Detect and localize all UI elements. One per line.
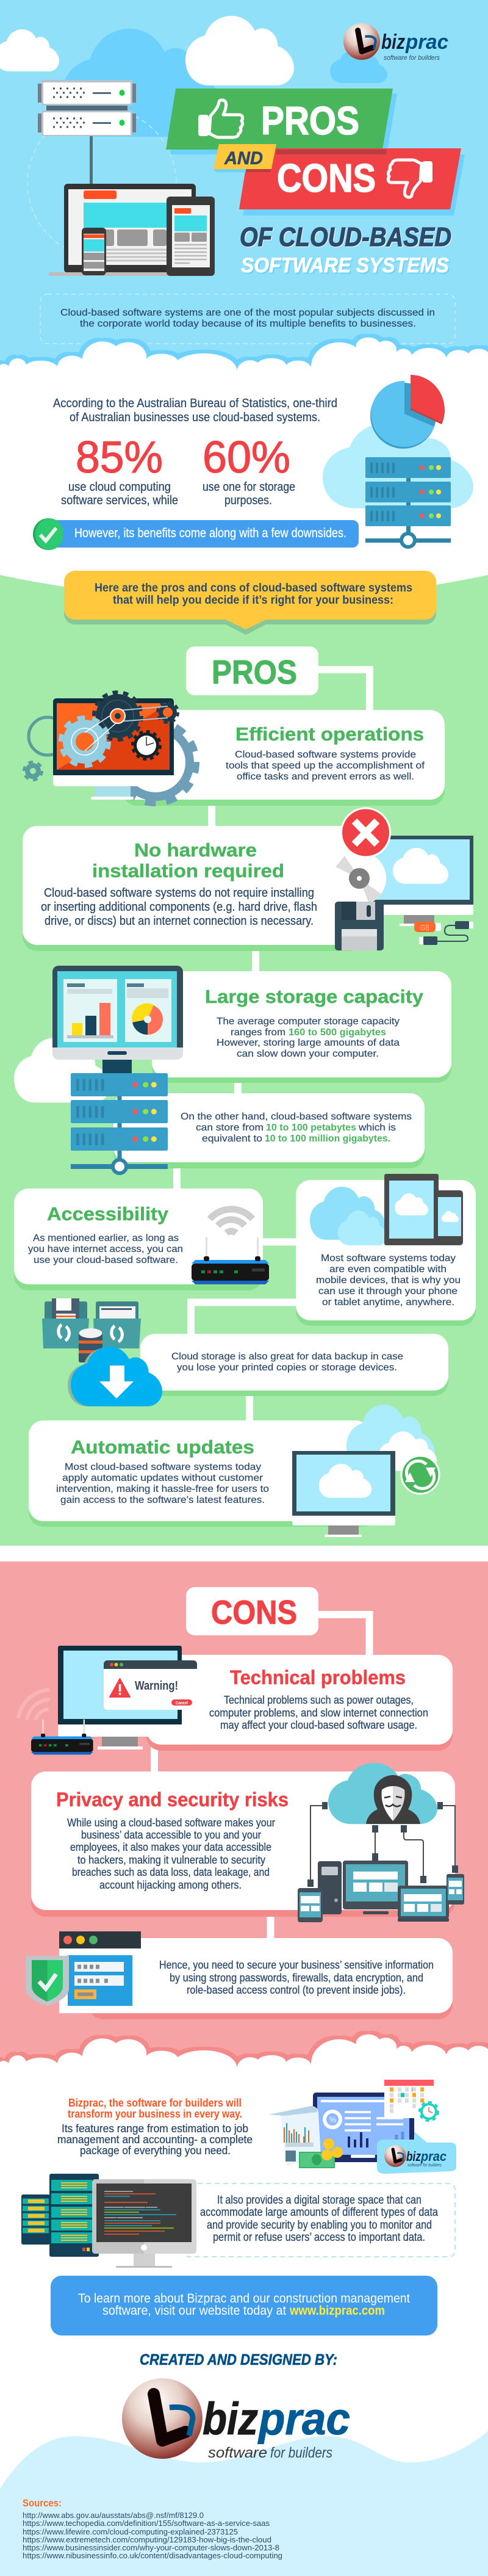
title banner: pros: PROS: [261, 98, 359, 143]
body text: to hackers, making it vulnerable to security: [77, 1854, 265, 1866]
body text: While using a cloud-based software makes your: [67, 1817, 275, 1829]
body text: breaches such as data loss, data leakage, and: [72, 1866, 270, 1878]
body text: apply automatic updates without customer: [62, 1473, 264, 1483]
callout: website blue box: To learn more about Bizprac and our construction management: [78, 2292, 410, 2306]
body text: intervention, making it hassle-free for users to: [56, 1484, 269, 1494]
icon: monitor with gears: [24, 692, 196, 803]
body text: or inserting additional components (e.g. hard drive, flash: [41, 900, 317, 914]
body text: permit or refuse users’ access to important data.: [213, 2231, 425, 2244]
cloud border between cons and bizprac: [0, 2031, 488, 2100]
laptop: [49, 184, 196, 276]
text: bizprac pitch: transform your business in every way.: [68, 2108, 242, 2120]
header sky panel: [0, 0, 488, 391]
icon: monitor, disc, floppy, usb: [332, 808, 473, 950]
logo: bizprac in bubble: [384, 2145, 447, 2168]
body text: business’ data accessible to you and your: [81, 1829, 261, 1841]
icon: cloud server with pie chart: [323, 375, 473, 547]
heading: cons: [186, 1587, 318, 1635]
logo: bizprac top: prac: [405, 31, 448, 54]
pink cons background: [0, 1561, 488, 2075]
panel: privacy and security risks: [31, 1763, 464, 1922]
heading: No hardware: [134, 839, 257, 861]
body text: 10 to 100 million gigabytes.: [265, 1134, 390, 1144]
icon: wifi router: [192, 1209, 269, 1284]
stats intro text: [53, 397, 337, 424]
heading: pros: PROS: [212, 653, 297, 691]
body text: can store from: [196, 1123, 264, 1133]
phone: [82, 228, 106, 275]
body text: [217, 1016, 400, 1059]
text: bizprac pitch: Its features range from estimation to job: [62, 2122, 248, 2135]
logo: bizprac large: software: [208, 2445, 267, 2461]
icon: folders, database and download cloud: [42, 1298, 162, 1406]
body text: office tasks and prevent errors as well.: [237, 772, 414, 782]
body text: Cloud-based software systems do not require installing: [44, 886, 314, 900]
body text: accommodate large amounts of different types of data: [200, 2206, 438, 2219]
body text: which is: [358, 1123, 396, 1133]
icon: monitor, disc, floppy, usb: GB: [420, 923, 429, 932]
logo: bizprac in bubble: prac: [420, 2149, 447, 2164]
body text: As mentioned earlier, as long as: [33, 1233, 179, 1243]
sources list: https://www.lifewire.com/cloud-computing-explained-2373125: [23, 2528, 238, 2536]
body text: Cloud-based software systems provide: [235, 750, 416, 760]
panel: accessibility: Accessibility: [47, 1203, 169, 1225]
body text: [181, 1112, 412, 1144]
heading: created and designed by: CREATED AND DESIGNED BY:: [140, 2351, 337, 2368]
sources list: https://www.nibusinessinfo.co.uk/content/disadvantages-cloud-computing: [23, 2552, 282, 2560]
sources list: http://www.abs.gov.au/ausstats/abs@.nsf/mf/8129.0: [23, 2511, 204, 2520]
panel: cloud storage petabytes: [71, 1073, 425, 1173]
panel: large storage capacity: [14, 966, 451, 1102]
heading: cons: CONS: [211, 1593, 297, 1631]
body text: Most software systems today: [321, 1253, 456, 1264]
body text: ranges from: [231, 1027, 285, 1038]
stats panel: [33, 375, 473, 550]
body text: equivalent to: [202, 1134, 262, 1144]
stat: 60 percent: [203, 433, 295, 507]
stat: 85 percent: 85%: [76, 433, 163, 482]
text: bizprac pitch: Bizprac, the software for builders will: [68, 2097, 242, 2109]
panel: technical problems: Technical problems: [230, 1666, 406, 1688]
body text: Hence, you need to secure your business’ sensitive information: [159, 1959, 434, 1971]
stat: 60 percent: purposes.: [224, 494, 272, 507]
icon: thumbs down: [388, 160, 432, 197]
body text: you have internet access, you can: [28, 1244, 183, 1254]
background clouds: [0, 16, 387, 258]
text: bizprac pitch: package of everything you need.: [80, 2144, 231, 2157]
icon: monitor with code: [92, 2179, 196, 2268]
callout: website blue box: www.bizprac.com: [289, 2304, 385, 2318]
body text: [67, 1817, 275, 1891]
body text: may affect your cloud-based software usage.: [220, 1719, 417, 1731]
heading: [92, 839, 284, 881]
icon: monitor warning and router: Warning!: [135, 1679, 178, 1693]
connectors for pros section: [177, 670, 370, 1425]
intro text box: Cloud-based software systems are one of the most popular subjects discussed in: [60, 308, 435, 318]
body text: use your cloud-based software.: [34, 1255, 178, 1265]
logo: bizprac large: prac: [257, 2393, 350, 2444]
sources list: Sources:: [23, 2497, 62, 2509]
panel: large storage capacity: Large storage capacity: [205, 986, 424, 1007]
body text: drive, or discs) but an internet connection is necessary.: [45, 914, 314, 928]
body text: Most cloud-based software systems today: [65, 1462, 261, 1472]
panel: accessibility: [14, 1189, 269, 1290]
panel: mobile compatibility: [296, 1174, 476, 1326]
icon: clouds, tablet and phone: [310, 1174, 463, 1245]
callout: downsides pill: However, its benefits come along with a few downsides.: [74, 526, 346, 540]
title: of cloud-based: OF CLOUD-BASED: [240, 222, 451, 252]
panel: secure your business: [26, 1931, 453, 2019]
logo: bizprac top: [343, 23, 448, 62]
title banner: cons: [239, 148, 465, 215]
logo: bizprac large: for builders: [270, 2445, 332, 2461]
body text: computer problems, and slow internet connection: [209, 1707, 428, 1719]
title banner: cons: CONS: [277, 156, 376, 200]
illustration: laptop, calendar, report and logo bubble: [269, 2080, 456, 2174]
tablet: [167, 197, 215, 276]
body text: mobile devices, that is why you: [316, 1275, 461, 1286]
callout: yellow intro to pros and cons: that will help you decide if it’s right for your business:: [113, 594, 393, 607]
icon: monitor with charts: [52, 966, 183, 1074]
callout: website blue box: software, visit our website today at: [102, 2304, 286, 2318]
callout: yellow intro to pros and cons: Here are the pros and cons of cloud-based software systems: [95, 582, 412, 595]
sources list: https://www.techopedia.com/definition/155/software-as-a-service-saas: [23, 2519, 270, 2528]
logo: bizprac in bubble: biz: [406, 2149, 421, 2164]
callout: yellow intro to pros and cons: [64, 571, 436, 635]
devices: [298, 1861, 464, 1922]
sources list: [23, 2497, 282, 2560]
icon: server stack and devices: [38, 80, 215, 276]
body text: [159, 1959, 434, 1996]
stat: 60 percent: 60%: [203, 433, 290, 482]
panel: efficient operations: Efficient operations: [235, 723, 424, 745]
panel: data backup: [42, 1298, 448, 1406]
title banner: and: AND: [224, 148, 263, 168]
body text: On the other hand, cloud-based software systems: [181, 1112, 412, 1122]
cloud border between header and stats: [0, 334, 488, 403]
body text: can use it through your phone: [318, 1286, 458, 1297]
stats intro text: of Australian businesses use cloud-based systems.: [70, 411, 320, 424]
logo: bizprac top: software for builders: [384, 54, 440, 62]
icon: cloud monitor with refresh: [292, 1405, 439, 1537]
body text: 10 to 100 petabytes: [266, 1123, 356, 1133]
body text: The average computer storage capacity: [217, 1016, 400, 1027]
body text: [316, 1253, 461, 1308]
body text: tools that speed up the accomplishment of: [226, 761, 425, 771]
body text: by using strong passwords, firewalls, data encryption, and: [170, 1972, 423, 1984]
icon: server rack: [71, 1073, 168, 1173]
logo: bizprac top: biz: [381, 31, 405, 54]
panel: digital storage: [21, 2174, 455, 2268]
body text: Technical problems such as power outages,: [224, 1694, 414, 1706]
heading: installation required: [92, 860, 284, 881]
body text: are even compatible with: [329, 1264, 447, 1275]
callout: downsides pill: [33, 518, 359, 550]
panel: no hardware installation: [23, 808, 473, 951]
pale blue footer wave: [0, 2431, 488, 2576]
body text: 160 to 500 gigabytes: [289, 1027, 386, 1038]
body text: and provide security by enabling you to monitor and: [207, 2219, 432, 2232]
body text: It also provides a digital storage space that can: [217, 2194, 422, 2207]
body text: can slow down your computer.: [237, 1049, 379, 1059]
illustration: laptop, calendar, report and logo bubble: %: [329, 2115, 336, 2124]
body text: role-based access control (to prevent inside jobs).: [187, 1984, 406, 1996]
sources list: https://www.extremetech.com/computing/129183-how-big-is-the-cloud: [23, 2536, 271, 2544]
stat: 85 percent: use cloud computing: [68, 480, 171, 494]
panel: automatic updates: [29, 1405, 439, 1537]
body text: Cloud storage is also great for data backup in case: [171, 1351, 403, 1362]
panel: privacy and security risks: Privacy and security risks: [56, 1789, 289, 1811]
green pros background: [0, 575, 488, 1546]
body text: you lose your printed copies or storage devices.: [177, 1362, 397, 1373]
intro text box: [40, 294, 455, 344]
body text: [209, 1694, 428, 1731]
logo: bizprac large: biz: [203, 2393, 258, 2444]
text: bizprac pitch: management and accounting- a complete: [57, 2133, 253, 2146]
title banner: and: [214, 144, 276, 172]
body text: [171, 1351, 403, 1373]
panel: technical problems: [18, 1646, 453, 1754]
icon: server racks: [21, 2174, 99, 2257]
icon: hacker cloud with connected devices: [298, 1763, 464, 1922]
body text: account hijacking among others.: [99, 1879, 242, 1891]
sources list: https://www.businessinsider.com/why-your-computer-slows-down-2013-8: [23, 2544, 279, 2552]
intro text box: the corporate world today because of its multiple benefits to businesses.: [80, 319, 416, 329]
panel: efficient operations: [24, 692, 445, 806]
body text: [226, 750, 425, 782]
callout: website blue box: [51, 2276, 437, 2335]
stats intro text: According to the Australian Bureau of Statistics, one-third: [53, 397, 337, 410]
stat: 85 percent: [61, 433, 178, 507]
body text: [200, 2194, 438, 2244]
logo: bizprac large: [122, 2378, 350, 2461]
connectors for cons section: [154, 1615, 370, 1944]
icon: login window with shield: [26, 1931, 141, 2013]
stat: 60 percent: use one for storage: [203, 480, 295, 494]
heading: pros: [186, 646, 318, 695]
body text: However, storing large amounts of data: [217, 1038, 400, 1048]
title banner: pros: [166, 89, 397, 154]
icon: monitor warning and router: Cancel: [176, 1700, 188, 1706]
body text: [56, 1462, 269, 1505]
logo: bizprac in bubble: software for builders: [407, 2163, 442, 2168]
panel: automatic updates: Automatic updates: [71, 1436, 254, 1458]
body text: or tablet anytime, anywhere.: [322, 1297, 454, 1308]
title: software systems: SOFTWARE SYSTEMS: [241, 254, 449, 277]
stat: 85 percent: software services, while: [61, 494, 178, 507]
body text: employees, it also makes your data accessible: [70, 1841, 271, 1853]
body text: [28, 1233, 183, 1265]
body text: [41, 886, 317, 928]
body text: gain access to the software’s latest features.: [60, 1495, 265, 1505]
icon: monitor warning and router: [18, 1646, 197, 1754]
icon: thumbs up: [198, 100, 243, 137]
text: bizprac pitch: [57, 2097, 253, 2157]
